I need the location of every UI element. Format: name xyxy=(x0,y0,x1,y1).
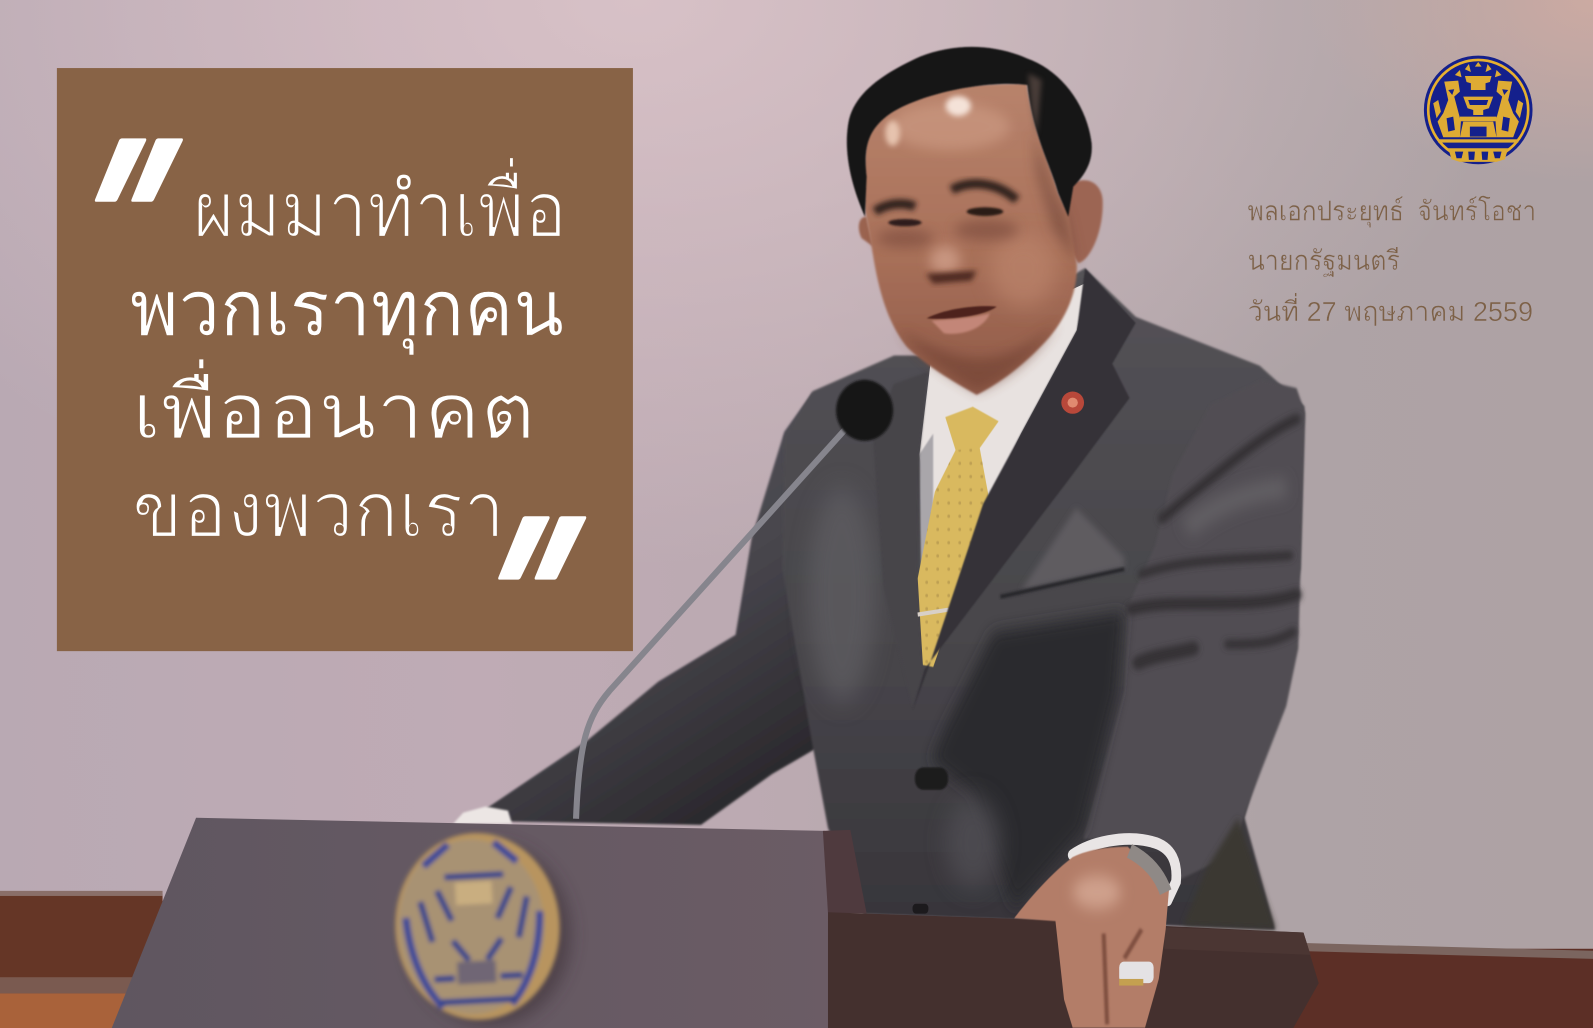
seal emblem marks xyxy=(419,873,532,1003)
sleeve folds xyxy=(1131,419,1297,663)
jacket rear flap xyxy=(1183,818,1276,929)
opening quote mark: " xyxy=(15,92,214,352)
box top edge xyxy=(1164,927,1311,955)
lapel pin xyxy=(1061,391,1084,414)
ear left xyxy=(859,217,873,247)
lower button xyxy=(913,904,928,914)
flames xyxy=(1455,62,1502,77)
eyes xyxy=(888,207,1003,226)
hair xyxy=(847,47,1092,217)
seal blue cutouts xyxy=(1447,89,1510,160)
cheek and jaw shading xyxy=(900,323,1057,392)
wood wainscot left xyxy=(0,891,163,1028)
shirt shadow xyxy=(919,434,933,578)
pocket line xyxy=(1000,569,1124,597)
podium xyxy=(112,818,1319,1028)
right cheek light xyxy=(990,233,1057,307)
microphone xyxy=(576,380,893,819)
seal disc xyxy=(390,829,565,1024)
lower lip xyxy=(932,313,990,334)
face xyxy=(863,83,1077,395)
ear xyxy=(1065,180,1103,263)
eye bags right xyxy=(955,219,1018,241)
left hand cuff xyxy=(453,807,512,824)
podium front panel xyxy=(112,818,833,1028)
dark lower body shading xyxy=(931,611,1124,909)
seal inner blue marks xyxy=(402,840,545,1009)
left lapel xyxy=(873,372,928,706)
seal emblem xyxy=(1433,62,1523,162)
urn xyxy=(1465,76,1492,90)
tie xyxy=(918,407,999,667)
mouth xyxy=(927,306,997,319)
left arm xyxy=(469,392,874,825)
sleeve right xyxy=(1083,380,1305,880)
headline line 4: ของพวกเรา xyxy=(132,467,505,553)
hand on podium xyxy=(1014,847,1169,1028)
lion left xyxy=(1438,81,1461,137)
knuckle highlights xyxy=(1073,876,1121,909)
microphone head xyxy=(836,380,893,441)
watch xyxy=(1130,851,1166,892)
pocket highlight xyxy=(1021,508,1124,591)
left chest highlight xyxy=(807,487,876,702)
quote panel xyxy=(15,68,633,730)
hand xyxy=(1014,847,1169,1028)
shirt cuff right xyxy=(1073,839,1176,900)
torso and sleeve detail drawn in local coordinates xyxy=(807,268,1305,929)
presenter figure xyxy=(469,47,1305,929)
podium seal xyxy=(390,829,571,1026)
base band xyxy=(1448,148,1508,162)
headline line 1: ผมมาทำเพื่อ xyxy=(193,157,567,254)
jacket body xyxy=(782,268,1304,929)
forehead sheen xyxy=(890,103,1010,150)
forehead highlight xyxy=(946,96,971,116)
nostril shadow xyxy=(926,271,977,284)
seal base xyxy=(457,960,497,984)
tie clip xyxy=(918,610,949,615)
scrolls xyxy=(1433,100,1523,118)
seal centre highlights xyxy=(455,881,493,905)
right lapel xyxy=(913,268,1136,710)
head drawn in local coordinates xyxy=(847,47,1103,395)
podium side face xyxy=(823,830,867,913)
role: นายกรัฐมนตรี xyxy=(1248,245,1400,277)
ring xyxy=(1119,962,1154,986)
temple shading xyxy=(1033,130,1077,263)
lion right xyxy=(1496,81,1519,137)
headline line 2: พวกเราทุกคน xyxy=(130,266,564,355)
presenter name and date xyxy=(1248,195,1536,327)
shoulder highlight xyxy=(1186,487,1286,529)
nose highlight xyxy=(930,246,960,274)
headline line 3: เพื่ออนาคต xyxy=(132,358,535,455)
wood wainscot right xyxy=(1290,943,1593,1028)
podium lower box xyxy=(828,912,1319,1028)
date: วันที่ 27 พฤษภาคม 2559 xyxy=(1248,293,1533,327)
lapel pin centre xyxy=(1068,398,1078,408)
receding hair streak xyxy=(1028,73,1042,137)
finger shadow xyxy=(1104,929,1142,1024)
seal edge rim xyxy=(394,836,549,1018)
name: พลเอกประยุทธ์ จันทร์โอชา xyxy=(1248,195,1536,228)
government seal top right xyxy=(1424,56,1533,164)
eye bags xyxy=(877,229,933,248)
eyebrows xyxy=(875,184,1017,212)
seal shadow xyxy=(408,843,571,1026)
floor xyxy=(1438,139,1518,143)
jacket button xyxy=(915,767,948,790)
temple highlight xyxy=(885,121,900,146)
lower front highlight xyxy=(945,797,1000,888)
closing quote mark: " xyxy=(419,470,617,730)
microphone stem xyxy=(576,423,851,819)
shirt xyxy=(919,282,1087,512)
pedestal xyxy=(1460,117,1497,121)
